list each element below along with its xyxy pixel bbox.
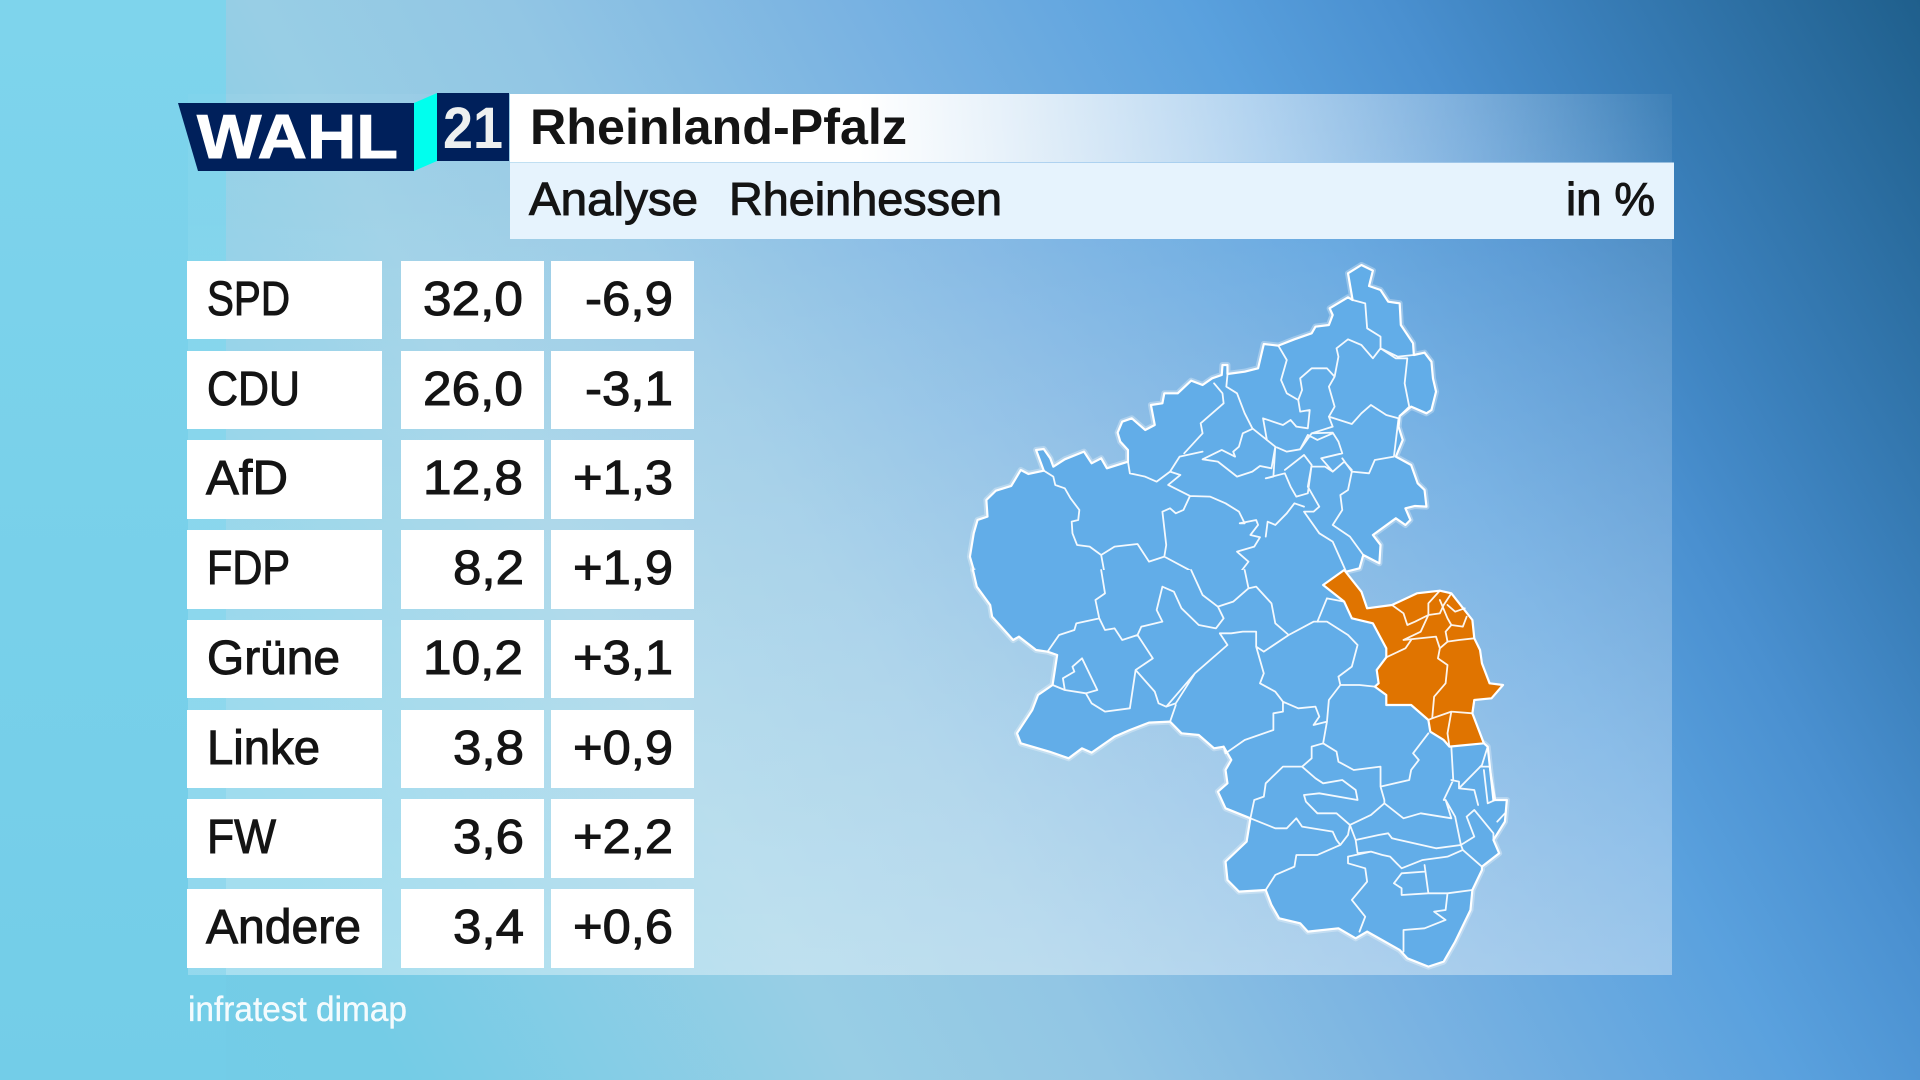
subtitle bar: in %: [1566, 173, 1655, 225]
row: Andere: 3,4: [453, 901, 524, 954]
row: FW: 3,6: [453, 811, 524, 864]
row: FDP: [187, 530, 694, 609]
row: SPD: [187, 261, 694, 339]
logo: WAHL 21: WAHL: [197, 103, 398, 172]
logo: WAHL 21: 21: [443, 96, 503, 161]
subtitle bar: Analyse: [529, 173, 698, 225]
row: AfD: +1,3: [573, 452, 673, 505]
row: FDP: 8,2: [453, 542, 524, 595]
map: southern districts: [973, 570, 1507, 967]
row: Linke: [187, 710, 694, 788]
row: Linke: 3,8: [453, 722, 524, 775]
row: Andere: Andere: [206, 901, 361, 954]
row: Andere: [187, 889, 694, 968]
subtitle bar: [510, 162, 1674, 239]
row: Linke: Linke: [207, 722, 320, 775]
row: SPD: SPD: [207, 273, 290, 326]
row: Grüne: Grüne: [207, 632, 340, 685]
row: Grüne: [187, 620, 694, 698]
row: FW: +2,2: [573, 811, 673, 864]
row: Linke: +0,9: [573, 722, 673, 775]
row: SPD: 32,0: [423, 273, 523, 326]
title bar: Rheinland-Pfalz: [530, 99, 907, 155]
row: CDU: [187, 351, 694, 429]
title bar: [510, 94, 1674, 162]
logo: WAHL 21: [178, 93, 509, 172]
row: AfD: 12,8: [423, 452, 523, 505]
map: Rheinland-Pfalz districts: [970, 265, 1507, 967]
subtitle bar: Rheinhessen: [729, 173, 1002, 225]
row: CDU: 26,0: [423, 363, 523, 416]
row: FW: FW: [207, 811, 277, 864]
row: FDP: FDP: [207, 542, 290, 595]
row: Grüne: 10,2: [423, 632, 523, 685]
row: Andere: +0,6: [573, 901, 673, 954]
row: FW: [187, 799, 694, 878]
map: northern districts: [970, 265, 1436, 583]
row: FDP: +1,9: [573, 542, 673, 595]
row: Grüne: +3,1: [573, 632, 673, 685]
results table: [187, 261, 694, 968]
row: SPD: -6,9: [585, 273, 673, 326]
map: highlighted region Rheinhessen: [1323, 570, 1503, 747]
source: infratest dimap: infratest dimap: [188, 990, 407, 1029]
row: AfD: [187, 440, 694, 519]
row: CDU: -3,1: [585, 363, 673, 416]
row: CDU: CDU: [207, 363, 300, 416]
row: AfD: AfD: [206, 452, 288, 505]
